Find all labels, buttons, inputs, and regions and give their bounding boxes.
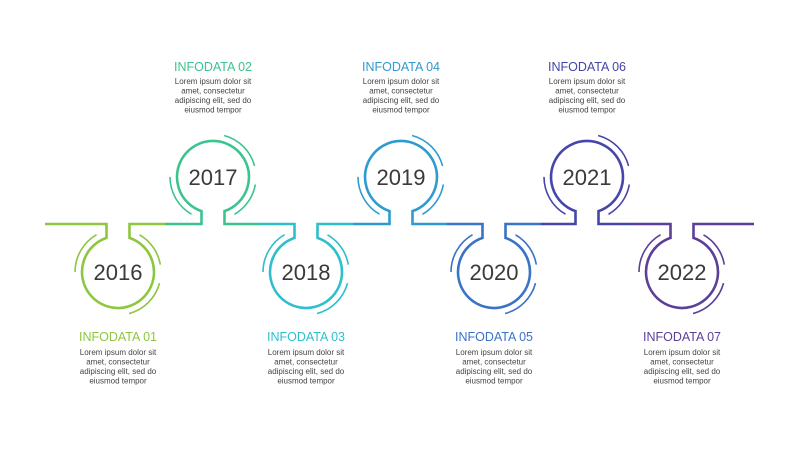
text: infodata 07: Lorem ipsum dolor sit: [644, 348, 721, 357]
text: infodata 07: INFODATA 07: [643, 330, 721, 344]
text: infodata 02: eiusmod tempor: [184, 106, 242, 114]
node 2019: [342, 118, 460, 236]
text: infodata 02: Lorem ipsum dolor sit: [175, 77, 252, 86]
text: infodata 04: INFODATA 04: [362, 60, 440, 74]
node 2020: [435, 213, 553, 331]
text: infodata 05: eiusmod tempor: [465, 376, 523, 386]
text: infodata 05: adipiscing elit, sed do: [456, 367, 533, 376]
text: infodata 04: amet, consectetur: [369, 86, 433, 96]
text: infodata 04: adipiscing elit, sed do: [363, 96, 440, 105]
text: infodata 02: amet, consectetur: [181, 86, 245, 96]
text: infodata 07: eiusmod tempor: [653, 376, 711, 386]
text: infodata 05: [455, 330, 533, 386]
years: 2018: [282, 260, 330, 285]
text: infodata 06: adipiscing elit, sed do: [549, 96, 626, 105]
text: infodata 07: amet, consectetur: [650, 358, 714, 366]
text: infodata 03: [267, 330, 345, 386]
node 2016: [45, 213, 177, 331]
text: infodata 01: [79, 330, 157, 386]
years: 2022: [658, 260, 706, 285]
text: infodata 07: adipiscing elit, sed do: [644, 367, 721, 376]
text: infodata 05: amet, consectetur: [462, 358, 526, 366]
text: infodata 02: INFODATA 02: [174, 60, 252, 74]
text: infodata 03: Lorem ipsum dolor sit: [268, 348, 345, 357]
text: infodata 05: INFODATA 05: [455, 330, 533, 344]
text: infodata 04: [362, 60, 440, 114]
text: infodata 03: eiusmod tempor: [277, 376, 335, 386]
years: 2020: [470, 260, 518, 285]
text: infodata 02: [174, 60, 252, 114]
text: infodata 03: adipiscing elit, sed do: [268, 367, 345, 376]
text: infodata 01: eiusmod tempor: [89, 376, 147, 386]
text: infodata 04: eiusmod tempor: [372, 106, 430, 114]
text: infodata 01: adipiscing elit, sed do: [80, 367, 157, 376]
node 2017: [154, 118, 272, 236]
text: infodata 03: INFODATA 03: [267, 330, 345, 344]
text: infodata 04: Lorem ipsum dolor sit: [363, 77, 440, 86]
text: infodata 01: amet, consectetur: [86, 358, 150, 366]
text: infodata 02: adipiscing elit, sed do: [175, 96, 252, 105]
text: infodata 03: amet, consectetur: [274, 358, 338, 366]
text: infodata 01: Lorem ipsum dolor sit: [80, 348, 157, 357]
text: infodata 06: amet, consectetur: [555, 86, 619, 96]
years: [94, 165, 706, 285]
text: infodata 06: [548, 60, 626, 114]
text: infodata 05: Lorem ipsum dolor sit: [456, 348, 533, 357]
text: infodata 01: INFODATA 01: [79, 330, 157, 344]
text: infodata 06: INFODATA 06: [548, 60, 626, 74]
text: infodata 06: Lorem ipsum dolor sit: [549, 77, 626, 86]
text: infodata 07: [643, 330, 721, 386]
years: 2016: [94, 260, 142, 285]
node 2018: [247, 213, 365, 331]
text: infodata 06: eiusmod tempor: [558, 106, 616, 114]
years: 2021: [563, 165, 611, 190]
years: 2017: [189, 165, 237, 190]
node 2021: [528, 118, 646, 236]
node 2022: [623, 213, 754, 331]
years: 2019: [377, 165, 425, 190]
